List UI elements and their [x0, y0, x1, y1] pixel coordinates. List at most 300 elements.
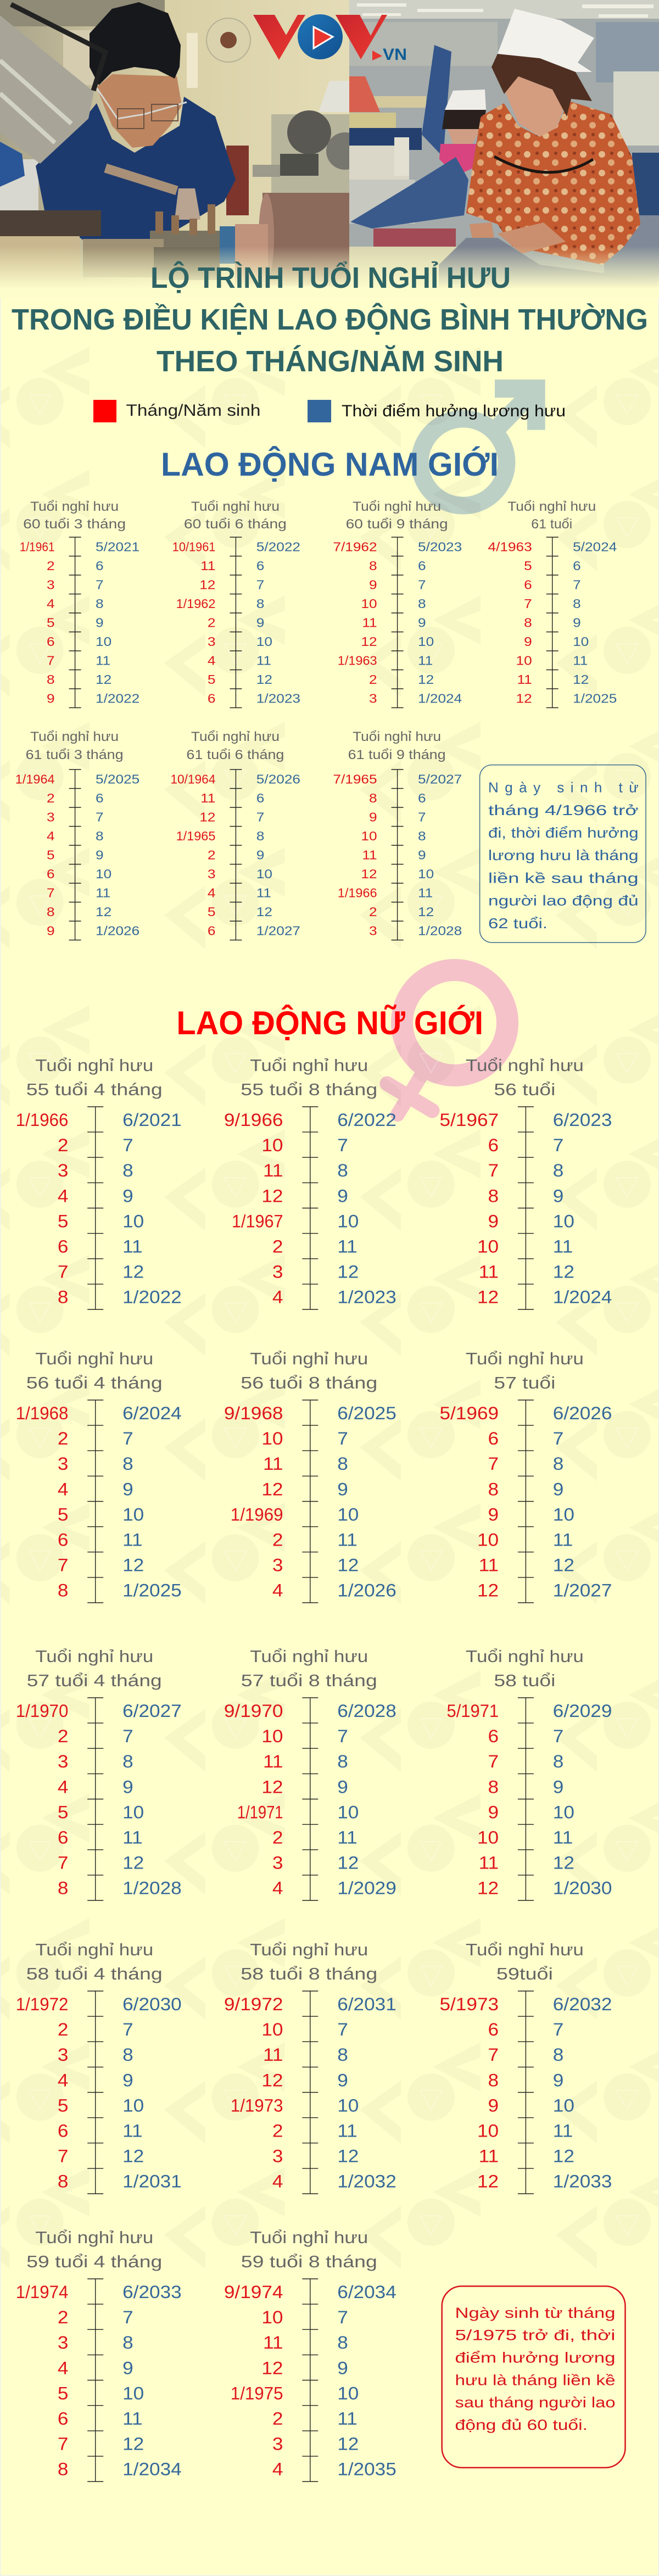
birth months: 9: [488, 1506, 499, 1525]
callout: female rule note: điểm hưởng lương: [455, 2350, 615, 2366]
birth months: 8: [58, 2172, 68, 2192]
birth months: 1/1966: [16, 1111, 68, 1130]
birth months: 6: [47, 635, 55, 649]
birth months: 6: [58, 2122, 68, 2141]
pension start months: 9: [122, 1480, 133, 1499]
pension start months: 6: [418, 791, 426, 806]
birth months: 4: [272, 2460, 283, 2479]
birth months: 5: [58, 1803, 68, 1822]
birth months: 2: [58, 1430, 68, 1449]
birth months: 1/1974: [16, 2283, 68, 2302]
table heading: 58 tuổi 4 tháng: [26, 1964, 163, 1983]
ruler: [87, 1400, 103, 1603]
pension start months: 11: [418, 654, 433, 668]
pension start months: 12: [337, 1263, 359, 1282]
table heading: [26, 1056, 163, 1099]
table: male 60 years 6 months: [172, 499, 300, 707]
birth months: 8: [369, 791, 377, 806]
birth months: 2: [58, 2309, 68, 2328]
pension start months: 7: [96, 811, 104, 824]
pension start months: 9: [337, 2071, 348, 2090]
pension start months: 7: [122, 2309, 133, 2328]
table heading: [184, 499, 287, 532]
table heading: Tuổi nghỉ hưu: [353, 729, 441, 744]
birth months: 11: [263, 2334, 283, 2353]
title: THEO THÁNG/NĂM SINH: [157, 345, 504, 378]
pension start months: 11: [553, 1531, 573, 1550]
birth months: 2: [208, 616, 215, 630]
pension start months: 7: [337, 1136, 348, 1156]
pension start months: 9: [256, 616, 264, 630]
pension start months: 12: [122, 2147, 144, 2166]
table heading: Tuổi nghỉ hưu: [250, 1940, 368, 1959]
callout: male rule note: liền kề sau tháng: [488, 869, 639, 886]
pension start months: 10: [256, 867, 272, 882]
pension start months: 10: [553, 1506, 574, 1525]
pension start months: 9: [256, 849, 264, 862]
callout: male rule note: 62 tuổi.: [488, 915, 548, 932]
birth months: 12: [261, 1187, 283, 1206]
pension start months: 8: [122, 2046, 133, 2065]
header photos: [0, 0, 659, 298]
birth months: [224, 2283, 283, 2479]
pension start months: 8: [553, 1162, 563, 1181]
birth months: 2: [58, 2021, 68, 2040]
birth months: 4: [58, 2359, 68, 2378]
table heading: [466, 1349, 584, 1392]
pension start months: 7: [337, 1430, 348, 1449]
pension start months: 1/2027: [256, 924, 300, 938]
birth months: 6: [488, 1727, 499, 1747]
pension start months: 1/2023: [337, 1288, 396, 1307]
birth months: 3: [272, 1263, 283, 1282]
pension start months: 11: [122, 1237, 143, 1257]
pension start months: [418, 773, 462, 938]
pension start months: 7: [418, 811, 426, 824]
pension start months: 8: [553, 1455, 563, 1474]
ruler: [87, 1107, 103, 1309]
birth months: 6: [47, 867, 55, 882]
pension start months: 1/2027: [553, 1581, 612, 1601]
table heading: Tuổi nghỉ hưu: [35, 1647, 153, 1666]
birth months: 6: [208, 692, 215, 706]
pension start months: 7: [337, 2021, 348, 2040]
birth months: 7: [488, 2046, 499, 2065]
birth months: 5: [58, 2384, 68, 2404]
pension start months: 11: [122, 1531, 143, 1550]
birth months: 8: [369, 559, 377, 573]
table heading: [346, 499, 448, 532]
pension start months: 8: [337, 2334, 348, 2353]
birth months: [447, 1702, 499, 1898]
birth months: 1/1970: [16, 1702, 68, 1721]
birth months: 4: [47, 829, 55, 844]
table heading: Tuổi nghỉ hưu: [466, 1647, 584, 1666]
pension start months: 8: [122, 1753, 133, 1772]
pension start months: 11: [573, 654, 588, 668]
birth months: 10: [361, 829, 377, 844]
table heading: [507, 499, 596, 532]
pension start months: 10: [418, 867, 434, 882]
birth months: 11: [200, 559, 215, 573]
pension start months: 7: [553, 1727, 563, 1747]
pension start months: [337, 1404, 396, 1601]
birth months: 3: [58, 1753, 68, 1772]
birth months: 3: [208, 867, 215, 882]
birth months: 3: [47, 811, 55, 824]
table heading: 59tuổi: [496, 1964, 553, 1983]
callout: female rule note: [442, 2286, 625, 2468]
pension start months: 10: [573, 635, 589, 649]
birth months: [16, 1702, 68, 1898]
pension start months: [553, 1702, 612, 1898]
pension start months: 9: [553, 1187, 563, 1206]
pension start months: 6/2022: [337, 1111, 396, 1130]
birth months: 11: [263, 1753, 283, 1772]
pension start months: 12: [418, 673, 434, 687]
pension start months: 6/2027: [122, 1702, 182, 1721]
table heading: 58 tuổi: [494, 1671, 555, 1690]
pension start months: 1/2024: [553, 1288, 612, 1307]
birth months: 8: [488, 1187, 499, 1206]
table heading: [26, 729, 124, 762]
heading: male workers: LAO ĐỘNG NAM GIỚI: [161, 446, 499, 483]
table heading: Tuổi nghỉ hưu: [250, 1056, 368, 1075]
pension start months: 9: [553, 2071, 563, 2090]
table heading: [23, 499, 126, 532]
pension start months: [337, 1111, 396, 1307]
pension start months: 5/2022: [256, 540, 300, 554]
pension start months: 7: [122, 2021, 133, 2040]
birth months: 3: [272, 1556, 283, 1575]
birth months: 11: [362, 616, 377, 630]
birth months: 6: [58, 1237, 68, 1257]
pension start months: 1/2026: [96, 924, 139, 938]
table heading: [26, 1940, 163, 1983]
callout: male rule note: đi, thời điểm hưởng: [488, 824, 639, 841]
pension start months: 1/2028: [418, 924, 462, 938]
birth months: 12: [261, 2359, 283, 2378]
birth months: 4: [272, 2172, 283, 2192]
birth months: [224, 1702, 283, 1898]
ruler: [302, 2279, 318, 2482]
ruler: [518, 1107, 534, 1309]
ruler: [230, 537, 242, 707]
table: female 56 years 4 months: [16, 1349, 182, 1603]
ruler: [87, 1991, 103, 2194]
birth months: 5: [47, 616, 55, 630]
pension start months: [96, 540, 139, 706]
callout: male rule note: lương hưu là tháng: [488, 847, 639, 863]
table heading: 61 tuổi 9 tháng: [348, 748, 446, 762]
birth months: 8: [524, 616, 532, 630]
birth months: 10: [261, 1136, 283, 1156]
pension start months: 11: [553, 1237, 573, 1257]
table: female 55 years 4 months: [16, 1056, 182, 1309]
pension start months: 12: [337, 2435, 359, 2454]
birth months: 4: [272, 1879, 283, 1898]
pension start months: 1/2034: [122, 2460, 182, 2479]
table heading: Tuổi nghỉ hưu: [250, 1647, 368, 1666]
pension start months: 8: [96, 597, 104, 611]
table: female 57 years: [439, 1349, 612, 1603]
table heading: Tuổi nghỉ hưu: [250, 2228, 368, 2247]
pension start months: 8: [337, 1455, 348, 1474]
birth months: 1/1967: [232, 1212, 283, 1231]
birth months: 2: [369, 905, 377, 919]
birth months: 2: [58, 1136, 68, 1156]
birth months: 6: [488, 1136, 499, 1156]
birth months: 8: [47, 905, 55, 919]
pension start months: 11: [122, 2122, 143, 2141]
pension start months: 8: [573, 597, 581, 611]
pension start months: 9: [553, 1778, 563, 1797]
table heading: 60 tuổi 6 tháng: [184, 517, 287, 532]
ruler: [392, 537, 404, 707]
pension start months: 9: [573, 616, 581, 630]
callout: female rule note: hưu là tháng liền kề: [455, 2372, 615, 2388]
table heading: Tuổi nghỉ hưu: [191, 729, 280, 744]
birth months: 12: [516, 692, 532, 706]
title: [12, 261, 648, 378]
birth months: 8: [58, 1879, 68, 1898]
pension start months: 11: [122, 1828, 143, 1848]
birth months: 6: [58, 2410, 68, 2429]
watermark pattern: [0, 347, 659, 2269]
pension start months: 12: [553, 1263, 574, 1282]
birth months: 1/1966: [338, 886, 377, 900]
pension start months: 5/2024: [573, 540, 617, 554]
birth months: 9: [488, 1212, 499, 1231]
pension start months: 8: [553, 2046, 563, 2065]
pension start months: 6/2026: [553, 1404, 612, 1424]
birth months: 12: [199, 811, 215, 824]
pension start months: [256, 773, 300, 938]
pension start months: [553, 1404, 612, 1601]
pension start months: 7: [337, 2309, 348, 2328]
birth months: 9/1974: [224, 2283, 283, 2302]
pension start months: 10: [553, 1212, 574, 1231]
birth months: [224, 1111, 283, 1307]
pension start months: 5/2027: [418, 773, 462, 787]
pension start months: [573, 540, 617, 706]
birth months: 5: [208, 673, 215, 687]
pension start months: 12: [256, 673, 272, 687]
pension start months: 10: [96, 867, 111, 882]
table: male 61 years 6 months: [170, 729, 300, 940]
birth months: 6: [524, 578, 532, 592]
table heading: [241, 1647, 377, 1690]
birth months: [439, 1995, 499, 2192]
birth months: [16, 2283, 68, 2479]
birth months: 2: [47, 791, 55, 806]
table: female 56 years 8 months: [224, 1349, 396, 1603]
table heading: 58 tuổi 8 tháng: [241, 1964, 377, 1983]
table heading: [466, 1056, 584, 1099]
table: male 61 years: [488, 499, 617, 707]
title: LỘ TRÌNH TUỔI NGHỈ HƯU: [150, 261, 511, 294]
birth months: 11: [263, 1455, 283, 1474]
table: female 58 years 8 months: [224, 1940, 396, 2194]
pension start months: 12: [256, 905, 272, 919]
table: female 58 years: [447, 1647, 612, 1900]
birth months: 6: [58, 1828, 68, 1848]
pension start months: 12: [122, 1263, 144, 1282]
title: TRONG ĐIỀU KIỆN LAO ĐỘNG BÌNH THƯỜNG: [12, 303, 648, 336]
legend: [93, 400, 566, 422]
pension start months: 6: [96, 559, 104, 573]
ruler: [69, 537, 81, 707]
birth months: 7: [58, 2435, 68, 2454]
birth months: 10: [477, 2122, 499, 2141]
birth months: 7: [488, 1162, 499, 1181]
birth months: 1/1963: [338, 654, 377, 668]
pension start months: 1/2025: [122, 1581, 182, 1601]
pension start months: 11: [96, 886, 110, 900]
birth months: 2: [58, 1727, 68, 1747]
pension start months: 6/2023: [553, 1111, 612, 1130]
pension start months: 8: [122, 1455, 133, 1474]
birth months: 8: [58, 2460, 68, 2479]
pension start months: [418, 540, 462, 706]
pension start months: 11: [553, 1828, 573, 1848]
pension start months: 12: [337, 1556, 359, 1575]
pension start months: 1/2031: [122, 2172, 182, 2192]
birth months: [16, 1404, 68, 1601]
birth months: 2: [272, 1531, 283, 1550]
ruler: [302, 1698, 318, 1900]
callout: male rule note: Ngày sinh từ: [488, 779, 639, 796]
pension start months: 12: [122, 2435, 144, 2454]
pension start months: 6/2030: [122, 1995, 182, 2015]
icon: male symbol: [420, 380, 545, 505]
pension start months: 9: [96, 616, 104, 630]
pension start months: 7: [256, 811, 264, 824]
callout: male rule note: [480, 765, 646, 943]
birth months: 2: [47, 559, 55, 573]
birth months: 4: [47, 597, 55, 611]
pension start months: 6: [418, 559, 426, 573]
pension start months: [256, 540, 300, 706]
pension start months: 9: [122, 2359, 133, 2378]
table: female 59 years: [439, 1940, 612, 2194]
birth months: 7: [58, 1556, 68, 1575]
birth months: 5: [524, 559, 532, 573]
photo fade into background: [0, 246, 659, 289]
birth months: 6: [208, 924, 215, 938]
logo: VOV.VN: [253, 14, 407, 64]
pension start months: 7: [418, 578, 426, 592]
table heading: Tuổi nghỉ hưu: [466, 1056, 584, 1075]
birth months: 9/1970: [224, 1702, 283, 1721]
pension start months: 11: [96, 654, 110, 668]
birth months: [333, 540, 377, 706]
birth months: 9: [47, 692, 55, 706]
birth months: [488, 540, 532, 706]
table heading: Tuổi nghỉ hưu: [191, 499, 280, 514]
table heading: [466, 1940, 584, 1983]
pension start months: 5/2025: [96, 773, 139, 787]
pension start months: 6: [256, 791, 264, 806]
pension start months: [553, 1995, 612, 2192]
pension start months: 12: [96, 673, 111, 687]
birth months: 10: [361, 597, 377, 611]
birth months: 12: [361, 635, 377, 649]
birth months: 5: [47, 849, 55, 862]
pension start months: 1/2029: [337, 1879, 396, 1898]
pension start months: 12: [337, 2147, 359, 2166]
birth months: 7/1965: [333, 773, 377, 787]
birth months: 3: [369, 924, 377, 938]
pension start months: 5/2026: [256, 773, 300, 787]
birth months: 9/1968: [224, 1404, 283, 1424]
birth months: 9: [524, 635, 532, 649]
pension start months: 7: [96, 578, 104, 592]
table heading: Tuổi nghỉ hưu: [30, 499, 119, 514]
pension start months: 11: [337, 1531, 358, 1550]
pension start months: 11: [256, 654, 271, 668]
pension start months: 9: [122, 1187, 133, 1206]
birth months: 5: [208, 905, 215, 919]
pension start months: 9: [337, 1187, 348, 1206]
pension start months: [122, 2283, 182, 2479]
pension start months: 9: [337, 2359, 348, 2378]
birth months: 12: [477, 1581, 499, 1601]
pension start months: 11: [418, 886, 433, 900]
birth months: [224, 1404, 283, 1601]
birth months: 10: [477, 1828, 499, 1848]
pension start months: 7: [337, 1727, 348, 1747]
pension start months: 11: [122, 2410, 143, 2429]
pension start months: 10: [337, 1803, 359, 1822]
birth months: 1/1968: [16, 1404, 68, 1424]
birth months: 9: [369, 811, 377, 824]
birth months: 7: [58, 1854, 68, 1873]
table heading: 56 tuổi 8 tháng: [241, 1373, 377, 1392]
birth months: 4: [272, 1581, 283, 1601]
birth months: 11: [479, 1854, 499, 1873]
pension start months: 6/2025: [337, 1404, 396, 1424]
table: male 60 years 3 months: [20, 499, 139, 707]
table heading: 61 tuổi 3 tháng: [26, 748, 124, 762]
birth months: 11: [517, 673, 532, 687]
birth months: 3: [47, 578, 55, 592]
birth months: 6: [488, 1430, 499, 1449]
birth months: [20, 540, 55, 706]
ruler: [302, 1991, 318, 2194]
table heading: Tuổi nghỉ hưu: [35, 1940, 153, 1959]
pension start months: 9: [418, 616, 426, 630]
birth months: 8: [488, 1480, 499, 1499]
pension start months: 1/2026: [337, 1581, 396, 1601]
pension start months: 10: [337, 1212, 359, 1231]
pension start months: 1/2033: [553, 2172, 612, 2192]
pension start months: 1/2023: [256, 692, 300, 706]
pension start months: 7: [553, 1430, 563, 1449]
pension start months: 7: [122, 1136, 133, 1156]
birth months: 9/1972: [224, 1995, 283, 2015]
birth months: 1/1964: [15, 773, 55, 787]
birth months: 11: [479, 1556, 499, 1575]
birth months: [15, 773, 55, 938]
table: female 58 years 4 months: [16, 1940, 182, 2194]
birth months: 1/1972: [16, 1995, 68, 2015]
icon: female symbol: [387, 970, 507, 1114]
birth months: 9: [369, 578, 377, 592]
birth months: 4: [58, 1187, 68, 1206]
table heading: 60 tuổi 9 tháng: [346, 517, 448, 532]
callout: male rule note: người lao động đủ: [488, 893, 639, 909]
